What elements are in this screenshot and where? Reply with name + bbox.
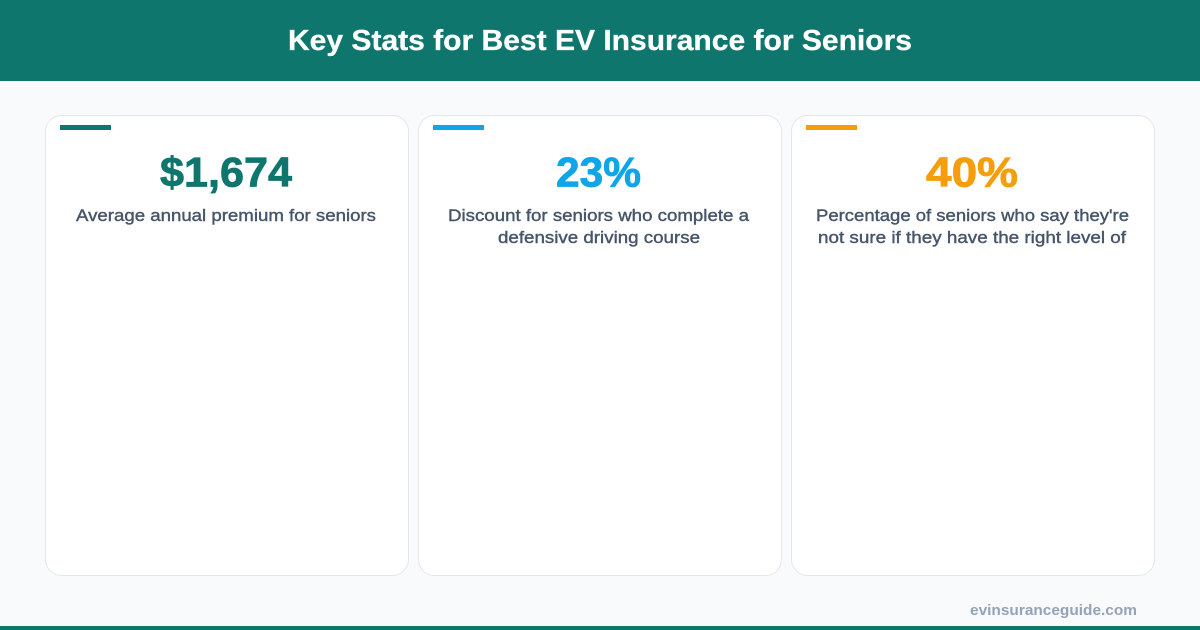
stat: 23%: 23% — [556, 148, 641, 196]
description: uncertainty — [816, 206, 1129, 247]
source credit: evinsuranceguide.com — [970, 602, 1137, 619]
description: premium: Average annual premium for seniors — [76, 206, 376, 225]
header banner — [0, 0, 1200, 81]
panel: coverage uncertainty — [792, 116, 1154, 576]
accent bar: blue — [433, 125, 484, 130]
description: discount — [448, 206, 750, 247]
stat: $1,674: $1,674 — [160, 148, 293, 196]
description: discount: defensive driving course — [498, 228, 700, 247]
stat: 40%: 40% — [926, 148, 1018, 196]
description: discount: Discount for seniors who complete a — [448, 206, 750, 225]
accent bar: amber — [806, 125, 857, 130]
panel: defensive driving discount — [418, 116, 782, 576]
accent bar: teal — [60, 125, 111, 130]
title: Key Stats for Best EV Insurance for Seniors — [288, 25, 912, 57]
description: uncertainty: Percentage of seniors who say they're — [816, 206, 1129, 225]
description: uncertainty: not sure if they have the right level of — [818, 228, 1126, 247]
footer bar — [0, 626, 1200, 630]
panel: average annual premium — [46, 116, 408, 576]
